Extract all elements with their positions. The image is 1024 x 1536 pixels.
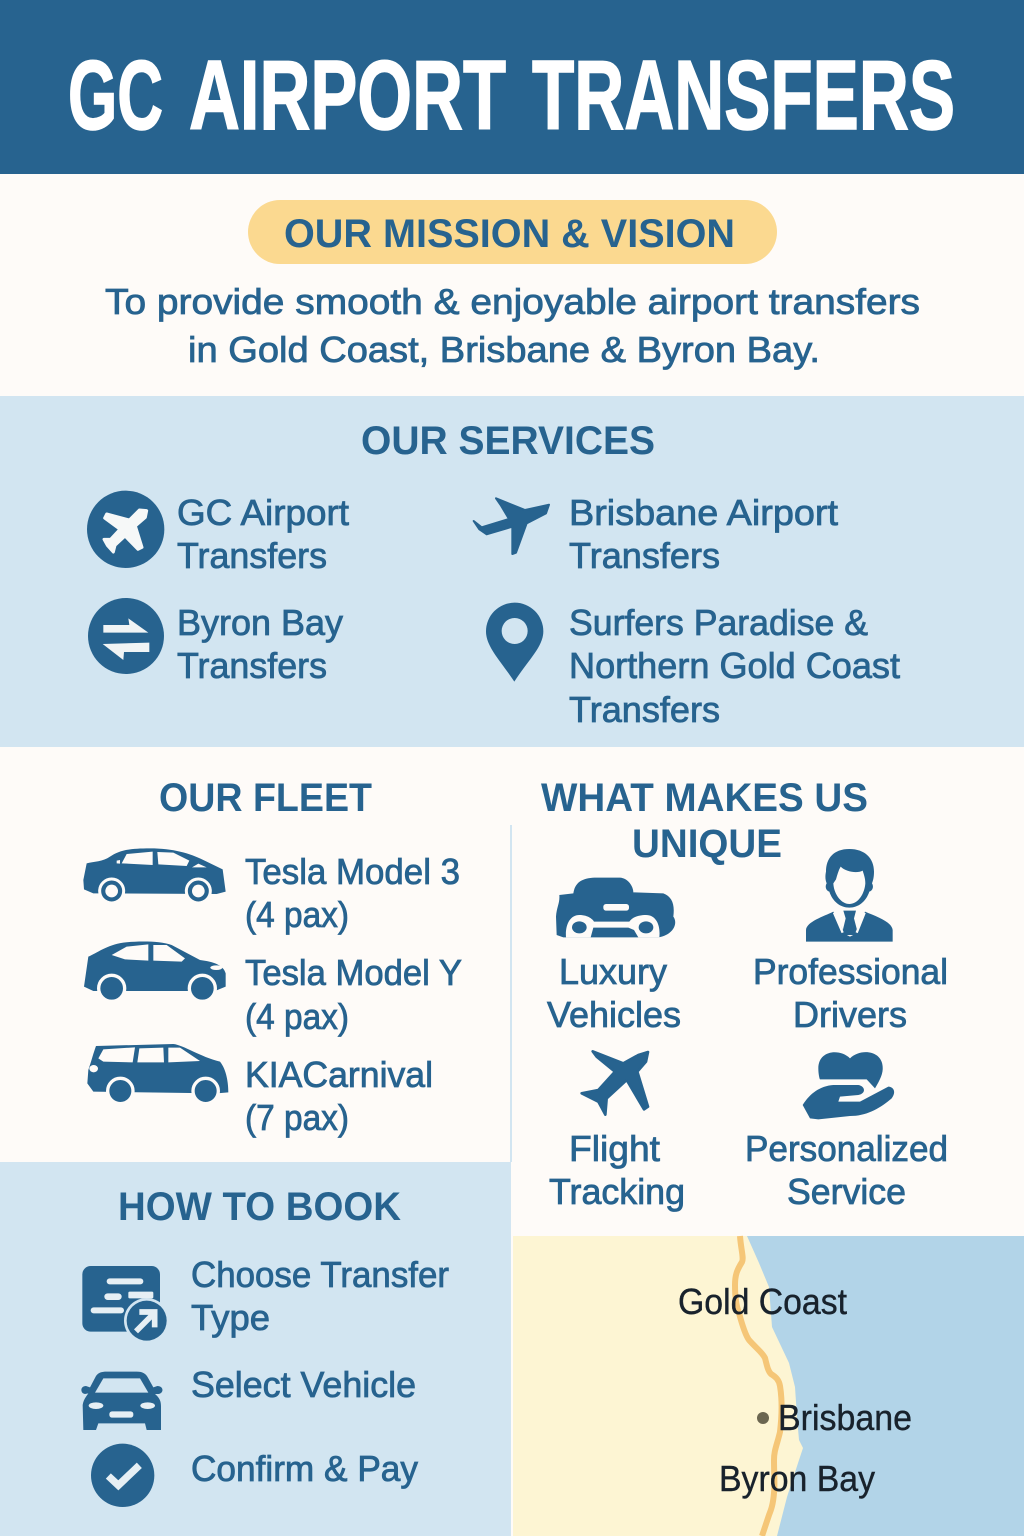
service: Surfers Paradise and Northern Gold Coast transfers — [569, 602, 900, 730]
icon: transfer arrows in circle — [88, 598, 164, 674]
unique item: luxury vehicles — [547, 951, 681, 1035]
fleet item: KIA Carnival: (7 pax) — [245, 1097, 349, 1138]
service: GC airport transfers: Transfers — [177, 535, 327, 576]
service: GC airport transfers — [177, 492, 349, 576]
step: choose transfer type: Type — [191, 1297, 270, 1338]
unique item: personalized service: Personalized — [745, 1128, 948, 1169]
unique item: luxury vehicles: Luxury — [559, 951, 667, 992]
service: Byron Bay transfers: Byron Bay — [177, 602, 343, 643]
title: AIRPORT — [189, 40, 506, 150]
fleet item: Tesla Model Y: (4 pax) — [245, 996, 349, 1037]
unique item: personalized service: Service — [787, 1171, 906, 1212]
service: Byron Bay transfers: Transfers — [177, 645, 327, 686]
unique item: professional drivers: Drivers — [793, 994, 907, 1035]
mission text — [105, 281, 920, 370]
unique heading: WHAT MAKES US — [541, 776, 868, 820]
service: Brisbane airport transfers — [569, 492, 838, 576]
step: choose transfer type — [191, 1254, 449, 1338]
fleet item: Tesla Model 3 — [245, 851, 460, 935]
icon: location pin — [486, 603, 543, 682]
unique item: luxury vehicles: Vehicles — [547, 994, 681, 1035]
fleet heading: OUR FLEET — [159, 776, 372, 820]
step: choose transfer type: Choose Transfer — [191, 1254, 449, 1295]
icon: KIA Carnival van — [87, 1044, 228, 1104]
title banner — [0, 0, 1024, 174]
fleet item: Tesla Model Y: Tesla Model Y — [245, 952, 462, 993]
step: select vehicle: Select Vehicle — [191, 1364, 416, 1405]
mission text: To provide smooth & enjoyable airport transfers — [105, 281, 920, 322]
unique heading — [541, 776, 868, 866]
how to book heading: HOW TO BOOK — [118, 1185, 401, 1229]
panel: how to book — [0, 1162, 511, 1536]
service: Byron Bay transfers — [177, 602, 343, 686]
icon: heart in hand — [803, 1052, 894, 1119]
panel: what makes us unique — [541, 776, 948, 1212]
unique item: professional drivers — [753, 951, 948, 1035]
mission heading pill — [248, 200, 777, 264]
unique item: flight tracking: Flight — [569, 1128, 660, 1169]
fleet item: Tesla Model 3: (4 pax) — [245, 894, 349, 935]
fleet item: KIA Carnival: KIACarnival — [245, 1054, 433, 1095]
icon: Tesla Model Y car — [84, 942, 226, 1001]
map label: Brisbane: Brisbane — [778, 1397, 912, 1438]
icon: plane in circle — [87, 491, 164, 568]
icon: Tesla Model 3 car — [83, 848, 226, 903]
unique item: professional drivers: Professional — [753, 951, 948, 992]
service: Brisbane airport transfers: Transfers — [569, 535, 720, 576]
unique item: flight tracking: Tracking — [549, 1171, 685, 1212]
map label: Gold Coast: Gold Coast — [678, 1281, 847, 1322]
panel: our services — [0, 396, 1024, 747]
icon: car front — [81, 1372, 162, 1430]
service: Surfers Paradise and Northern Gold Coast transfers: Northern Gold Coast — [569, 645, 900, 686]
title: GC — [68, 40, 163, 150]
service: Surfers Paradise and Northern Gold Coast transfers: Surfers Paradise & — [569, 602, 868, 643]
panel: our fleet — [83, 776, 462, 1138]
map marker: Brisbane — [757, 1412, 769, 1424]
fleet item: Tesla Model 3: Tesla Model 3 — [245, 851, 460, 892]
map: sea — [747, 1236, 1024, 1536]
services heading: OUR SERVICES — [361, 419, 655, 463]
unique item: personalized service — [745, 1128, 948, 1212]
service: Surfers Paradise and Northern Gold Coast transfers: Transfers — [569, 689, 720, 730]
service: Brisbane airport transfers: Brisbane Airport — [569, 492, 838, 533]
icon: professional driver — [806, 849, 893, 942]
icon: luxury car — [556, 878, 675, 937]
icon: plane — [474, 498, 549, 554]
service: GC airport transfers: GC Airport — [177, 492, 349, 533]
icon: check mark circle — [91, 1444, 154, 1507]
icon: choose transfer form — [82, 1266, 169, 1343]
unique heading: UNIQUE — [632, 822, 782, 866]
fleet item: Tesla Model Y — [245, 952, 462, 1037]
mission text: in Gold Coast, Brisbane & Byron Bay. — [188, 329, 820, 370]
map label: Byron Bay: Byron Bay — [719, 1458, 875, 1499]
step: confirm and pay: Confirm & Pay — [191, 1448, 418, 1489]
fleet item: KIA Carnival — [245, 1054, 433, 1138]
panel: mission and vision — [105, 200, 920, 370]
icon: flight tracking plane — [582, 1051, 648, 1115]
mission heading pill: OUR MISSION & VISION — [284, 212, 735, 256]
unique item: flight tracking — [549, 1128, 685, 1212]
panel: map — [513, 1236, 1024, 1536]
map: road — [735, 1236, 782, 1536]
